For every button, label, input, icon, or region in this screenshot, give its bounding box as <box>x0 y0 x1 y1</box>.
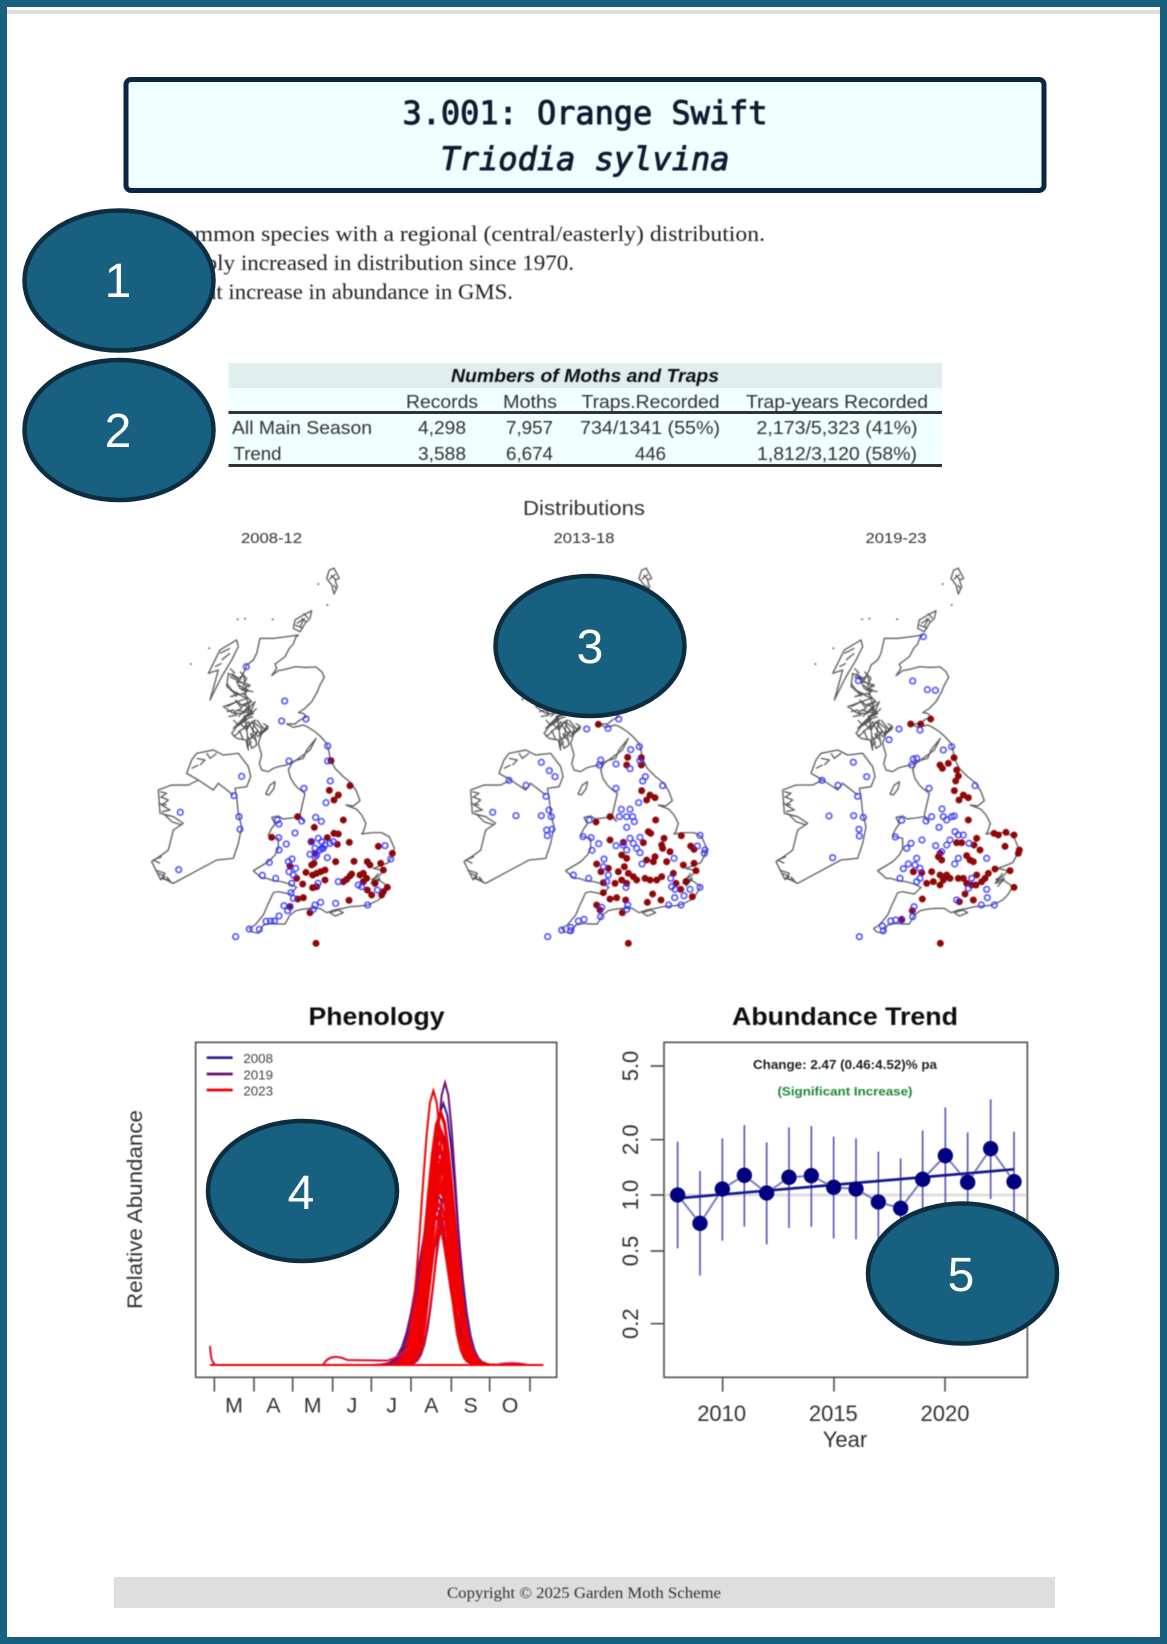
table: numbers of moths and traps: 2,173/5,323 (41%) <box>756 418 918 438</box>
phenology month labels <box>225 1394 518 1418</box>
callout 4: 4 <box>288 1167 314 1220</box>
trend axes <box>651 1042 1027 1392</box>
phenology month labels: M <box>304 1394 322 1418</box>
table: numbers of moths and traps: Trap-years Recorded <box>746 392 928 412</box>
trend error bars <box>678 1099 1014 1276</box>
table: numbers of moths and traps: 4,298 <box>418 418 466 438</box>
title box: Triodia sylvina <box>440 140 730 178</box>
copyright footer: Copyright © 2025 Garden Moth Scheme <box>447 1585 721 1602</box>
table: numbers of moths and traps: 734/1341 (55%) <box>580 418 720 438</box>
table: numbers of moths and traps: Moths <box>503 392 557 412</box>
table: numbers of moths and traps: 3,588 <box>418 444 466 464</box>
callout 1 <box>24 210 214 350</box>
table: numbers of moths and traps: Numbers of Moths and Traps <box>451 366 719 386</box>
phenology month labels: J <box>386 1394 397 1418</box>
phenology month labels: O <box>502 1394 518 1418</box>
copyright footer <box>114 1577 1055 1608</box>
species summary text <box>123 221 765 304</box>
table: numbers of moths and traps: Traps.Recorded <box>582 392 720 412</box>
trend series <box>670 1141 1022 1231</box>
phenology legend: 2008 <box>243 1051 273 1066</box>
phenology month labels: A <box>266 1394 281 1418</box>
table: numbers of moths and traps: 7,957 <box>506 418 553 438</box>
callout 2: 2 <box>105 405 131 458</box>
phenology axes <box>196 1042 557 1392</box>
trend axis labels: 2010 <box>697 1401 746 1426</box>
map 2008-12: 2008-12 <box>241 531 302 547</box>
callout 2 <box>24 360 214 500</box>
callout 3: 3 <box>577 621 603 674</box>
table: numbers of moths and traps: Trend <box>234 444 282 464</box>
phenology month labels: J <box>347 1394 357 1418</box>
trend axis labels: 2.0 <box>618 1124 643 1155</box>
phenology legend: 2019 <box>243 1067 273 1082</box>
trend axis labels: 5.0 <box>618 1051 643 1081</box>
phenology month labels: S <box>464 1394 478 1418</box>
table: numbers of moths and traps: 446 <box>635 444 666 464</box>
species summary text: Significant increase in abundance in GMS. <box>123 279 513 304</box>
heading: distributions: Distributions <box>523 498 645 520</box>
species summary text: Common species with a regional (central/easterly) distribution. <box>167 221 765 246</box>
trend axis labels: 1.0 <box>618 1180 643 1210</box>
table: numbers of moths and traps: 6,674 <box>506 444 553 464</box>
trend axis labels <box>618 1051 969 1452</box>
phenology chart: Phenology <box>308 1003 445 1031</box>
phenology month labels: M <box>225 1394 243 1418</box>
trend axis labels: 2015 <box>809 1401 858 1426</box>
table: numbers of moths and traps: Records <box>406 392 478 412</box>
map 2013-18 <box>464 531 708 943</box>
callout 5 <box>868 1204 1057 1344</box>
phenology month labels: A <box>424 1394 439 1418</box>
abundance trend chart: Abundance Trend <box>732 1003 958 1031</box>
species summary text: Possibly increased in distribution since 1970. <box>157 250 574 275</box>
trend axis labels: 2020 <box>921 1401 969 1426</box>
abundance trend chart <box>618 1003 1027 1452</box>
phenology chart: Relative Abundance <box>124 1110 147 1309</box>
map 2008-12 <box>152 531 394 943</box>
table: numbers of moths and traps: All Main Season <box>232 418 372 438</box>
callout 4 <box>208 1121 397 1261</box>
title box <box>126 80 1044 190</box>
title box: 3.001: Orange Swift <box>402 94 768 132</box>
callout 3 <box>496 576 684 716</box>
map 2013-18: 2013-18 <box>554 531 614 547</box>
trend axis labels: 0.2 <box>618 1308 643 1339</box>
phenology legend: 2023 <box>243 1083 273 1098</box>
trend axis labels: 0.5 <box>618 1236 643 1266</box>
trend axis labels: Year <box>823 1427 867 1452</box>
trend change annotation: Change: 2.47 (0.46:4.52)% pa <box>753 1058 938 1072</box>
map 2019-23 <box>776 531 1019 943</box>
table: numbers of moths and traps <box>228 363 942 467</box>
table: numbers of moths and traps: 1,812/3,120 (58%) <box>757 444 917 464</box>
phenology curves <box>210 1083 543 1365</box>
phenology legend <box>207 1051 273 1098</box>
callout 1: 1 <box>105 255 131 308</box>
map 2019-23: 2019-23 <box>866 531 926 547</box>
phenology chart <box>124 1003 557 1418</box>
significance annotation: (Significant Increase) <box>777 1085 912 1099</box>
callout 5: 5 <box>948 1249 974 1302</box>
